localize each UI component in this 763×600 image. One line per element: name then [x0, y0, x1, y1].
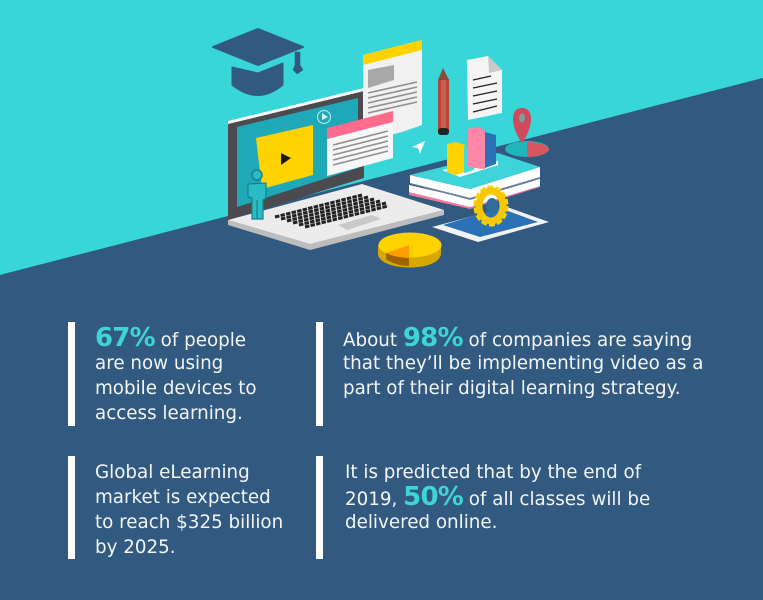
text block: 67% mobile: 67% of people [95, 323, 246, 353]
accent bar: bottom left [68, 456, 75, 559]
text block: eLearning market: Global eLearning [95, 462, 250, 483]
text block: 50% online classes: delivered online. [345, 512, 497, 533]
text block: 50% online classes [345, 462, 650, 533]
text block: 50% online classes: 2019, 50% of all classes will be [345, 482, 650, 512]
text block: 67% mobile: mobile devices to [95, 378, 257, 399]
text block: 98% video: that they’ll be implementing video as a [343, 353, 703, 374]
icon: bar chart [447, 127, 496, 175]
text block: 98% video [343, 323, 703, 399]
text block: 98% video: About 98% of companies are saying [343, 323, 692, 353]
icon: gear [477, 189, 505, 223]
text block: eLearning market: by 2025. [95, 537, 176, 558]
text block: eLearning market: to reach $325 billion [95, 512, 283, 533]
icon: tablet [432, 207, 549, 242]
icon: laptop [228, 88, 444, 250]
icon: web page card [363, 40, 422, 142]
icon: pencil [438, 68, 449, 135]
icon: person figure [248, 170, 266, 219]
accent bar: bottom right [316, 456, 323, 559]
text block: eLearning market [95, 462, 283, 558]
text block: 67% mobile: access learning. [95, 403, 243, 424]
icon: document [467, 56, 502, 120]
accent bar: top right [316, 322, 323, 426]
text block: eLearning market: market is expected [95, 487, 271, 508]
icon: stacked books [409, 153, 540, 209]
text block: 67% mobile: are now using [95, 353, 223, 374]
text block: 98% video: part of their digital learning strategy. [343, 378, 681, 399]
icon: map pin [505, 108, 549, 157]
icon: pie chart [378, 232, 442, 268]
accent bar: top left [68, 322, 75, 426]
icon: graduation cap [213, 29, 303, 96]
icon: cursor arrow [412, 141, 425, 154]
text block: 50% online classes: It is predicted that by the end of [345, 462, 641, 483]
icon: pink text card [327, 111, 393, 176]
text block: 67% mobile [95, 323, 257, 424]
